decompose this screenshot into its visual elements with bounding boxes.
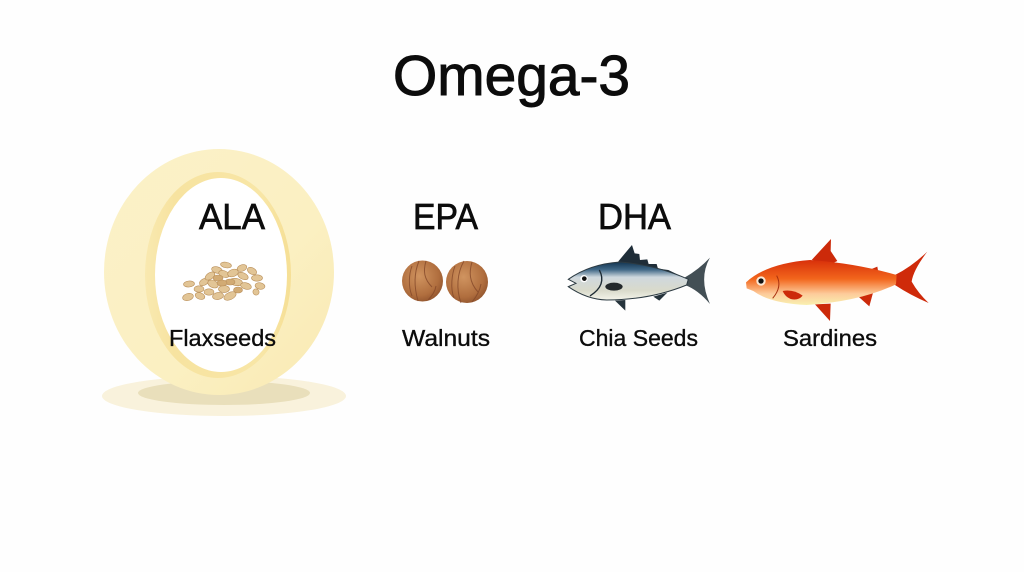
EPA label: EPA: [413, 196, 478, 237]
ring shadow: [102, 376, 346, 416]
icon: walnuts: [402, 260, 488, 303]
ALA label: ALA: [199, 196, 265, 237]
DHA label: DHA: [598, 196, 671, 237]
Walnuts label: Walnuts: [402, 325, 490, 351]
icon: flaxseeds: [182, 261, 265, 302]
Flaxseeds label: Flaxseeds: [169, 325, 276, 351]
ALA ring icon: [102, 149, 346, 416]
Chia Seeds label: Chia Seeds: [579, 325, 698, 351]
icon: blue fish: [568, 245, 710, 311]
Sardines label: Sardines: [783, 325, 877, 351]
ring body: [104, 149, 334, 395]
icon: red fish: [746, 239, 929, 321]
title: Omega-3: [393, 44, 630, 108]
